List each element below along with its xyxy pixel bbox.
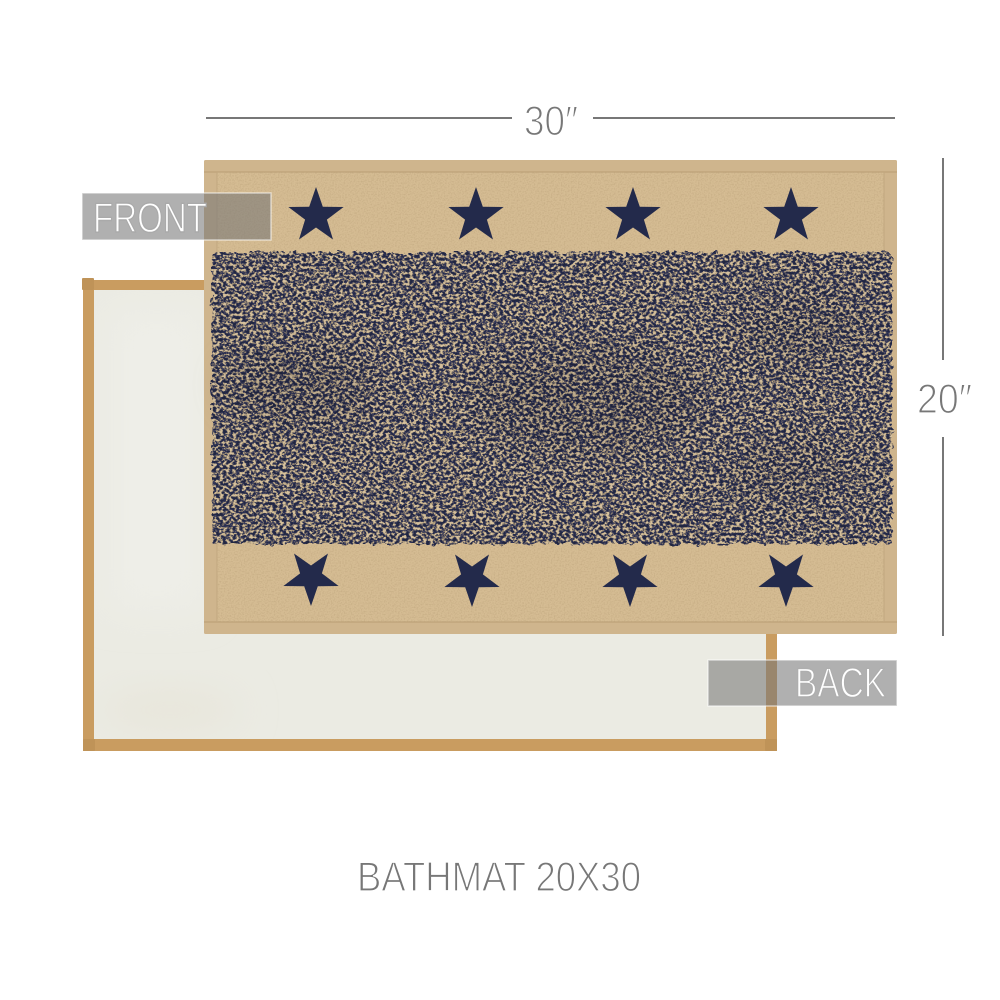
top star 4 bbox=[763, 187, 819, 240]
back label bbox=[708, 659, 897, 706]
front of bathmat bbox=[204, 160, 897, 634]
front binding bbox=[204, 160, 897, 634]
top star 1 bbox=[288, 187, 344, 240]
product title: BATHMAT 20X30 bbox=[357, 853, 641, 900]
back cloth bbox=[94, 290, 766, 739]
back label: BACK bbox=[795, 659, 886, 706]
bottom star 3 bbox=[602, 554, 658, 607]
jute field bbox=[217, 172, 884, 622]
infographic: bathmat dimensions bbox=[82, 106, 970, 891]
front label: FRONT bbox=[93, 194, 207, 241]
back of bathmat bbox=[82, 278, 777, 751]
bottom star 4 bbox=[758, 554, 814, 607]
back binding bbox=[83, 280, 777, 751]
shag pile bbox=[212, 252, 892, 544]
height dimension: 20 inches: 20″ bbox=[917, 375, 972, 422]
bottom star 2 bbox=[444, 554, 500, 607]
width dimension: 30 inches: 30″ bbox=[524, 97, 578, 144]
top star 2 bbox=[448, 187, 504, 240]
bottom star 1 bbox=[283, 554, 339, 606]
shag shading bbox=[225, 290, 870, 500]
top star 3 bbox=[605, 187, 661, 240]
